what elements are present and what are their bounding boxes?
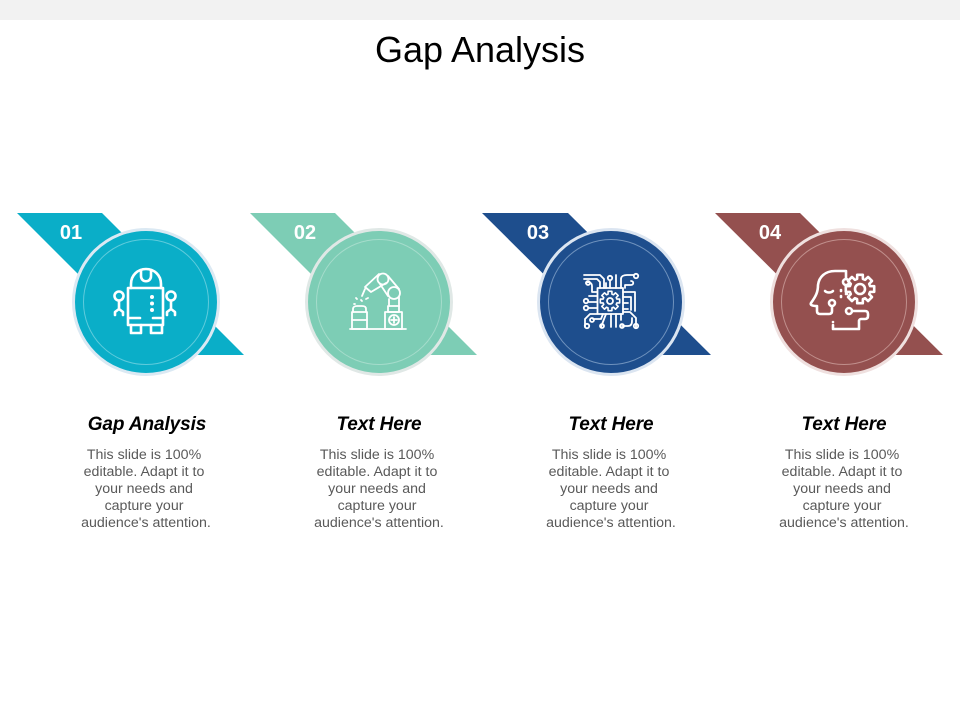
ribbon 04 — [715, 213, 943, 355]
text block 01: editable. Adapt it to — [84, 464, 204, 480]
panel: step 04 — [715, 213, 943, 531]
title: Gap Analysis — [375, 29, 585, 70]
icon: robot — [114, 269, 176, 333]
text block 04: audience's attention. — [779, 515, 909, 531]
text block 04: editable. Adapt it to — [782, 464, 902, 480]
icon: circuit chip with gear — [584, 274, 638, 328]
icon: robotic arm — [350, 274, 406, 329]
number 03: 03 — [527, 222, 549, 244]
heading 03: Text Here — [568, 414, 654, 435]
text block 02: capture your — [338, 498, 417, 514]
top band — [0, 0, 960, 20]
text block 04: This slide is 100% — [785, 447, 900, 463]
ribbon 01 — [17, 213, 244, 355]
text block 04: capture your — [803, 498, 882, 514]
heading 01: Gap Analysis — [88, 414, 206, 435]
number 02: 02 — [294, 222, 316, 244]
text block 03: capture your — [570, 498, 649, 514]
panel: step 03 — [482, 213, 711, 531]
text block 03: This slide is 100% — [552, 447, 667, 463]
text block 02: your needs and — [328, 481, 426, 497]
text block 03: audience's attention. — [546, 515, 676, 531]
ribbon 02 — [250, 213, 477, 355]
text block 02: This slide is 100% — [320, 447, 435, 463]
panel: step 02 — [250, 213, 477, 531]
circle 04 — [772, 230, 916, 374]
text block 01: This slide is 100% — [87, 447, 202, 463]
text block 02: audience's attention. — [314, 515, 444, 531]
circle 02 — [306, 230, 452, 374]
heading 02: Text Here — [336, 414, 422, 435]
text block 03: your needs and — [560, 481, 658, 497]
ribbon 03 — [482, 213, 711, 355]
text block 02: editable. Adapt it to — [317, 464, 437, 480]
panel: step 01 — [17, 213, 244, 531]
text block 03: editable. Adapt it to — [549, 464, 669, 480]
text block 01: audience's attention. — [81, 515, 211, 531]
text block 04: your needs and — [793, 481, 891, 497]
number 04: 04 — [759, 222, 782, 244]
number 01: 01 — [60, 222, 82, 244]
heading 04: Text Here — [802, 414, 887, 435]
text block 01: capture your — [105, 498, 184, 514]
circle 01 — [74, 230, 218, 374]
icon: head with gear — [811, 271, 874, 329]
circle 03 — [538, 230, 684, 374]
text block 01: your needs and — [95, 481, 193, 497]
